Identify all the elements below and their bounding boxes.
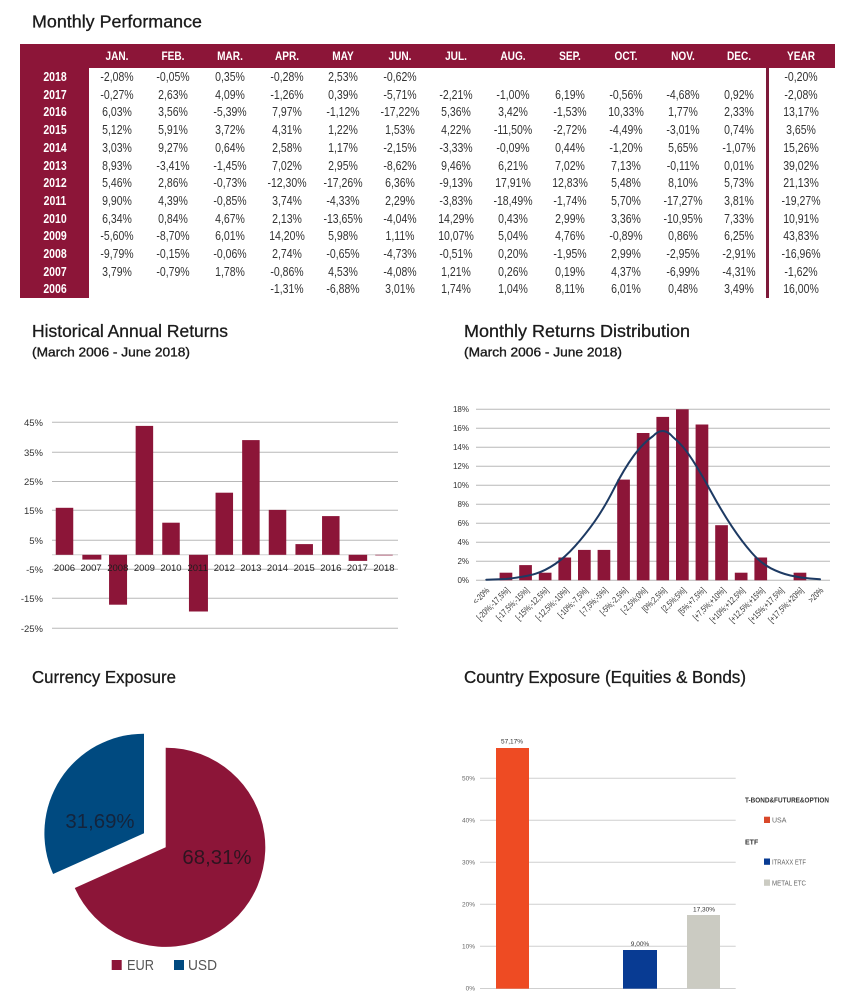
x-axis bin labels: [+15%;+17,5%] (747, 585, 786, 625)
bar chart: country exposure (462, 738, 829, 992)
row 2012: -0,73% (213, 176, 247, 190)
row 2006: 0,48% (668, 282, 698, 296)
legend: USA (772, 818, 787, 824)
row 2014: 2014 (43, 141, 67, 155)
row 2009: 0,86% (668, 229, 698, 243)
row 2008: -4,73% (383, 247, 417, 261)
row 2008: -1,95% (553, 247, 587, 261)
x-axis year labels: 2012 (214, 563, 235, 574)
row 2012: -12,30% (267, 176, 307, 190)
row 2010: 2010 (43, 212, 67, 226)
row 2013: 6,21% (498, 158, 528, 172)
row 2017: 0,92% (724, 88, 754, 102)
row 2006: 2006 (43, 282, 67, 296)
heading: country exposure: Country Exposure (Equities & Bonds) (464, 667, 746, 687)
row 2011: -3,83% (439, 194, 473, 208)
row 2010: 14,29% (438, 212, 474, 226)
y-axis labels: 15% (24, 506, 44, 517)
bar value labels: 17,30% (693, 906, 715, 914)
y-axis labels: 50% (462, 776, 475, 782)
y-axis labels: 0% (457, 576, 469, 585)
heading: historical annual returns (32, 321, 228, 360)
row 2010: 10,91% (783, 212, 819, 226)
row 2008: -2,95% (666, 247, 700, 261)
row 2009: 1,11% (385, 229, 414, 243)
table header row: AUG. (500, 49, 526, 63)
row 2012: 2,86% (158, 176, 188, 190)
x-axis bin labels: >20% (806, 585, 826, 605)
row 2016 (43, 105, 819, 119)
row 2013: 2013 (43, 158, 67, 172)
pie legend: USD (188, 958, 217, 974)
row 2006: -6,88% (326, 282, 360, 296)
x-axis year labels: 2011 (187, 563, 208, 574)
row 2012: -17,26% (323, 176, 363, 190)
row 2016: -17,22% (380, 105, 420, 119)
x-axis year labels (54, 563, 395, 574)
row 2009: -5,60% (100, 229, 134, 243)
row 2018: 2,53% (328, 70, 358, 84)
row 2010: -4,04% (383, 212, 417, 226)
row 2009: -8,70% (156, 229, 190, 243)
row 2013 (43, 158, 819, 172)
row 2011: 9,90% (102, 194, 132, 208)
row 2010: 0,84% (158, 212, 188, 226)
row 2009: 14,20% (269, 229, 305, 243)
y-axis labels: 8% (457, 500, 469, 509)
row 2018: -0,20% (784, 70, 818, 84)
row 2016: 2,33% (724, 105, 754, 119)
row 2016: 6,03% (102, 105, 132, 119)
row 2007: 4,53% (328, 265, 358, 279)
x-axis bin labels: [-10%;-7,5%] (556, 585, 590, 620)
row 2011: 5,70% (611, 194, 641, 208)
row 2008: 2,74% (272, 247, 302, 261)
row 2015: -11,50% (494, 123, 532, 137)
row 2015: 4,31% (272, 123, 302, 137)
y-axis labels: 40% (462, 818, 475, 824)
row 2013: 9,46% (441, 158, 471, 172)
y-axis labels: 16% (453, 424, 469, 433)
pie legend (112, 958, 217, 974)
x-axis year labels: 2018 (373, 563, 395, 574)
row 2015: -4,49% (609, 123, 643, 137)
y-axis labels: 12% (453, 462, 469, 471)
row 2007: 1,21% (441, 265, 471, 279)
row 2008: 2,99% (611, 247, 641, 261)
row 2010: 7,33% (724, 212, 754, 226)
x-axis bin labels: [+7,5%;+10%] (691, 585, 728, 622)
row 2015: 1,22% (328, 123, 358, 137)
row 2014: -0,09% (496, 141, 530, 155)
x-axis bin labels: [+10%;+12,5%] (708, 585, 747, 625)
x-axis bin labels: [-17,5%;-15%] (494, 585, 531, 622)
row 2007: -0,86% (270, 265, 304, 279)
row 2012 (43, 176, 819, 190)
row 2016: 1,77% (668, 105, 698, 119)
row 2016: 5,36% (441, 105, 471, 119)
row 2014: -2,15% (383, 141, 417, 155)
heading: historical annual returns: (March 2006 - June 2018) (32, 346, 190, 360)
row 2009: 5,98% (328, 229, 358, 243)
row 2007: 3,79% (102, 265, 132, 279)
row 2013: 8,93% (102, 158, 132, 172)
y-axis labels (453, 405, 469, 585)
row 2006: 8,11% (555, 282, 584, 296)
row 2008: -9,79% (100, 247, 134, 261)
row 2006: -1,31% (270, 282, 304, 296)
heading: monthly returns distribution: Monthly Returns Distribution (464, 321, 690, 341)
row 2009: 6,01% (215, 229, 245, 243)
row 2016: -5,39% (213, 105, 247, 119)
row 2017 (43, 88, 818, 102)
table header row: SEP. (559, 49, 581, 63)
table header row: JAN. (106, 49, 128, 63)
EUR slice (75, 748, 265, 947)
row 2016: -1,12% (326, 105, 360, 119)
bar value labels: 57,17% (501, 738, 523, 746)
row 2011: 2,29% (385, 194, 415, 208)
y-axis labels: 4% (457, 538, 469, 547)
x-axis year labels: 2016 (320, 563, 341, 574)
row 2016: 13,17% (783, 105, 819, 119)
row 2018: -0,05% (156, 70, 190, 84)
row 2007 (43, 265, 818, 279)
row 2011: -4,33% (326, 194, 360, 208)
monthly performance table (20, 44, 835, 298)
row 2018: 2018 (43, 70, 67, 84)
legend: T-BOND&FUTURE&OPTION (745, 798, 829, 804)
bar value labels: 9,00% (631, 941, 649, 948)
row 2013: 39,02% (783, 158, 819, 172)
table header row: NOV. (671, 49, 695, 63)
row 2014: -1,07% (722, 141, 756, 155)
pie legend: EUR (127, 958, 154, 974)
row 2016: 2016 (43, 105, 67, 119)
y-axis labels (21, 418, 44, 635)
row 2006: 6,01% (611, 282, 641, 296)
row 2012: 21,13% (783, 176, 819, 190)
row 2014: 0,44% (555, 141, 585, 155)
y-axis labels: 45% (24, 418, 44, 429)
row 2014 (43, 141, 819, 155)
row 2013: 2,95% (328, 158, 358, 172)
row 2014: -3,33% (439, 141, 473, 155)
row 2009: 2009 (43, 229, 67, 243)
x-axis bin labels: [5%;+7,5%] (676, 585, 708, 617)
row 2014: 15,26% (783, 141, 819, 155)
row 2009 (43, 229, 819, 243)
row 2016: -1,53% (553, 105, 587, 119)
row 2014: 2,58% (272, 141, 302, 155)
x-axis year labels: 2014 (267, 563, 288, 574)
x-axis year labels: 2006 (54, 563, 75, 574)
x-axis year labels: 2013 (240, 563, 261, 574)
y-axis labels: 25% (24, 477, 44, 488)
row 2006: 1,74% (441, 282, 471, 296)
row 2007: -0,79% (156, 265, 190, 279)
row 2006 (43, 282, 819, 296)
row 2011: 2011 (44, 194, 66, 208)
x-axis year labels: 2015 (294, 563, 315, 574)
combo chart: monthly returns distribution (453, 405, 830, 625)
row 2013: 0,01% (724, 158, 754, 172)
row 2015: 4,22% (441, 123, 471, 137)
bar chart: historical annual returns (21, 418, 398, 635)
USD value label: 31,69% (65, 811, 135, 833)
row 2009: 5,04% (498, 229, 528, 243)
y-axis labels: 10% (453, 481, 469, 490)
legend: METAL ETC (772, 880, 806, 888)
bar value labels (501, 738, 715, 948)
row 2018: -0,62% (383, 70, 417, 84)
y-axis labels: 35% (24, 448, 44, 459)
y-axis labels: 30% (462, 860, 475, 866)
row 2015: 5,12% (102, 123, 132, 137)
row 2016: 3,56% (158, 105, 188, 119)
x-axis bin labels: [+17,5%;+20%] (766, 585, 806, 625)
row 2009: -0,89% (609, 229, 643, 243)
row 2009: 10,07% (438, 229, 474, 243)
row 2014: 0,64% (215, 141, 245, 155)
row 2018: -0,28% (270, 70, 304, 84)
row 2014: 9,27% (158, 141, 188, 155)
y-axis labels: -15% (21, 594, 44, 605)
row 2006: 3,49% (724, 282, 754, 296)
heading: monthly returns distribution (464, 321, 690, 360)
row 2011: -18,49% (493, 194, 533, 208)
row 2008: -0,15% (156, 247, 190, 261)
row 2017: 4,09% (215, 88, 245, 102)
table header row: MAY (332, 49, 354, 63)
y-axis labels: 6% (457, 519, 469, 528)
legend: ITRAXX ETF (772, 860, 806, 866)
row 2011: -17,27% (663, 194, 703, 208)
row 2016: 10,33% (608, 105, 644, 119)
x-axis year labels: 2009 (134, 563, 155, 574)
row 2013: -1,45% (213, 158, 247, 172)
table header row: YEAR (787, 49, 815, 63)
y-axis labels: 5% (29, 536, 44, 547)
row 2013: 7,02% (555, 158, 585, 172)
row 2008: -0,06% (213, 247, 247, 261)
bar: USA (496, 748, 529, 989)
y-axis labels (462, 776, 475, 992)
row 2008 (43, 247, 821, 261)
pie chart: currency exposure (44, 734, 265, 974)
row 2015: -3,01% (666, 123, 700, 137)
row 2013: -0,11% (667, 158, 699, 172)
row 2007: -4,31% (722, 265, 756, 279)
x-axis bin labels: <-20% (471, 585, 492, 606)
row 2007: 1,78% (215, 265, 245, 279)
row 2010: 3,36% (611, 212, 641, 226)
row 2006: 3,01% (385, 282, 415, 296)
row 2017: -4,68% (666, 88, 700, 102)
heading: monthly returns distribution: (March 2006 - June 2018) (464, 346, 622, 360)
row 2013: 7,13% (611, 158, 641, 172)
row 2006: 1,04% (498, 282, 528, 296)
row 2009: 43,83% (783, 229, 819, 243)
row 2010: 6,34% (102, 212, 132, 226)
row 2012: 8,10% (668, 176, 698, 190)
row 2014: 1,17% (328, 141, 358, 155)
normal distribution curve (486, 431, 820, 580)
row 2007: -4,08% (383, 265, 417, 279)
x-axis year labels: 2017 (347, 563, 368, 574)
row 2015: 3,65% (786, 123, 816, 137)
row 2017: -5,71% (383, 88, 417, 102)
row 2017: -1,26% (270, 88, 304, 102)
row 2011: -1,74% (553, 194, 587, 208)
x-axis bin labels: [-20%;-17,5%] (475, 585, 512, 622)
row 2017: 0,39% (328, 88, 358, 102)
row 2013: -8,62% (383, 158, 417, 172)
x-axis bin labels: [-5%;-2,5%] (598, 585, 630, 617)
row 2010: 4,67% (215, 212, 245, 226)
y-axis labels: 2% (457, 557, 469, 566)
row 2014: 3,03% (102, 141, 132, 155)
y-axis labels: 14% (453, 443, 469, 452)
y-axis labels: 10% (462, 944, 475, 950)
table header row: DEC. (727, 49, 751, 63)
row 2015: 3,72% (215, 123, 245, 137)
table header row: JUN. (389, 49, 411, 63)
row 2008: -2,91% (722, 247, 756, 261)
row 2018: -2,08% (100, 70, 134, 84)
row 2009: 6,25% (724, 229, 754, 243)
row 2008: -16,96% (781, 247, 821, 261)
row 2007: 2007 (43, 265, 67, 279)
table header row: APR. (275, 49, 299, 63)
row 2015: 0,74% (724, 123, 754, 137)
row 2013: 7,02% (272, 158, 302, 172)
row 2008: -0,65% (326, 247, 360, 261)
row 2008: -0,51% (439, 247, 473, 261)
x-axis bin labels: [+12,5%;+15%] (727, 585, 767, 625)
x-axis year labels: 2008 (107, 563, 128, 574)
bars (56, 426, 393, 612)
row 2014: 5,65% (668, 141, 698, 155)
row 2007: 0,19% (555, 265, 585, 279)
row 2015: 5,91% (158, 123, 188, 137)
table header row: FEB. (162, 49, 184, 63)
y-axis labels: 20% (462, 902, 475, 908)
row 2010: 2,99% (555, 212, 585, 226)
row 2017: 6,19% (555, 88, 585, 102)
row 2015: 2015 (43, 123, 67, 137)
row 2010 (43, 212, 819, 226)
y-axis labels: 0% (466, 986, 475, 992)
x-axis bin labels (471, 585, 826, 625)
row 2017: -0,27% (100, 88, 134, 102)
row 2017: -2,08% (784, 88, 818, 102)
row 2014: -1,20% (609, 141, 643, 155)
row 2008: 0,20% (498, 247, 528, 261)
row 2012: 5,46% (102, 176, 132, 190)
row 2007: 4,37% (611, 265, 641, 279)
row 2015: 1,53% (385, 123, 415, 137)
histogram bars (500, 409, 806, 580)
table header row: OCT. (615, 49, 637, 63)
row 2012: 17,91% (495, 176, 531, 190)
title: monthly performance: Monthly Performance (32, 12, 202, 32)
y-axis labels: -25% (21, 624, 44, 635)
row 2007: 0,26% (498, 265, 528, 279)
row 2007: -6,99% (666, 265, 700, 279)
bar: METAL ETC (687, 915, 720, 989)
row 2017: 2,63% (158, 88, 188, 102)
row 2012: 5,48% (611, 176, 641, 190)
row 2013: -3,41% (156, 158, 190, 172)
row 2017: -1,00% (496, 88, 530, 102)
row 2017: 2017 (43, 88, 67, 102)
row 2012: 2012 (43, 176, 67, 190)
row 2009: 4,76% (555, 229, 585, 243)
x-axis bin labels: [0%;2,5%] (640, 585, 669, 614)
x-axis year labels: 2007 (81, 563, 102, 574)
x-axis bin labels: [-12,5%;-10%] (534, 585, 571, 622)
x-axis bin labels: [-7,5%;-5%] (578, 585, 610, 617)
row 2012: 5,73% (724, 176, 754, 190)
row 2018 (43, 70, 818, 84)
USD slice (44, 734, 144, 874)
legend (745, 798, 829, 888)
row 2010: -10,95% (663, 212, 703, 226)
row 2011 (44, 194, 821, 208)
row 2007: -1,62% (784, 265, 818, 279)
row 2016: 3,42% (498, 105, 528, 119)
table header row: MAR. (217, 49, 243, 63)
row 2011: 4,39% (158, 194, 188, 208)
bar: ITRAXX ETF (623, 950, 657, 989)
row 2011: -19,27% (781, 194, 821, 208)
y-axis labels: -5% (26, 565, 44, 576)
row 2017: -2,21% (439, 88, 473, 102)
row 2016: 7,97% (272, 105, 302, 119)
row 2010: 0,43% (498, 212, 528, 226)
row 2012: 12,83% (552, 176, 588, 190)
row 2006: 16,00% (783, 282, 819, 296)
row 2011: 3,81% (724, 194, 754, 208)
table header row (106, 49, 815, 63)
table header row: JUL. (445, 49, 467, 63)
row 2011: -0,85% (213, 194, 247, 208)
heading: historical annual returns: Historical Annual Returns (32, 321, 228, 341)
x-axis bin labels: [2,5%;5%] (659, 585, 688, 614)
row 2011: 3,74% (272, 194, 302, 208)
row 2015 (43, 123, 816, 137)
x-axis bin labels: [-15%;-12,5%] (514, 585, 551, 622)
x-axis year labels: 2010 (160, 563, 182, 574)
row 2010: -13,65% (323, 212, 363, 226)
heading: currency exposure: Currency Exposure (32, 667, 176, 687)
row 2010: 2,13% (272, 212, 302, 226)
row 2008: 2008 (43, 247, 67, 261)
row 2018: 0,35% (215, 70, 245, 84)
y-axis labels: 18% (453, 405, 469, 414)
row 2012: 6,36% (385, 176, 415, 190)
row 2012: -9,13% (439, 176, 473, 190)
row 2015: -2,72% (553, 123, 587, 137)
row 2017: -0,56% (609, 88, 643, 102)
EUR value label: 68,31% (182, 847, 252, 869)
x-axis bin labels: [-2,5%;0%] (619, 585, 649, 616)
legend: ETF (745, 840, 759, 846)
